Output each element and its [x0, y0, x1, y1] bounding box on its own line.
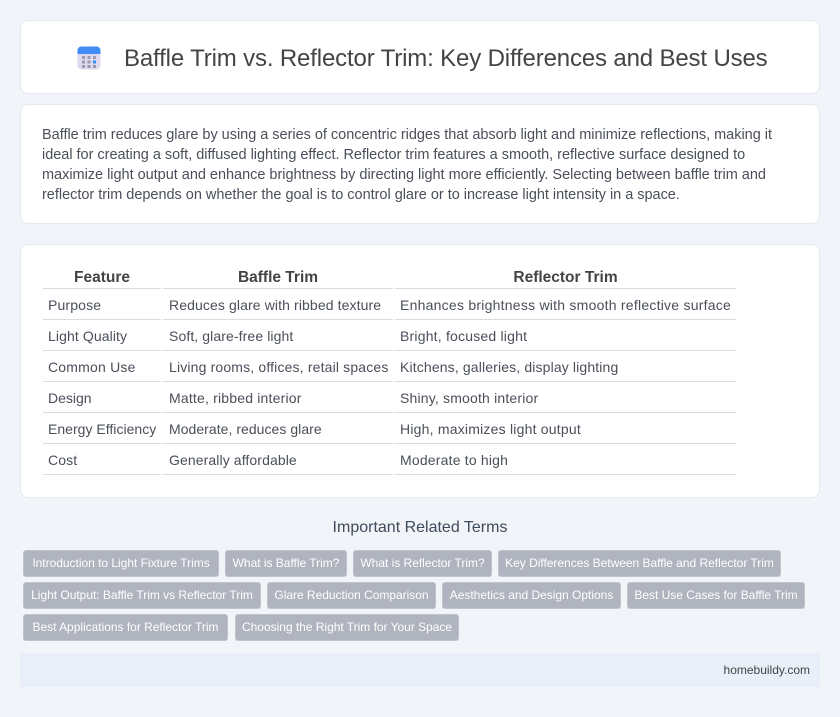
intro text [42, 127, 772, 203]
tag: Aesthetics and Design Options [450, 588, 613, 602]
footer text: homebuildy.com: homebuildy.com [724, 663, 810, 677]
row: cost: Moderate to high [400, 452, 508, 468]
tag: Light Output: Baffle Trim vs Reflector Trim [31, 588, 253, 602]
tag: Best Use Cases for Baffle Trim [634, 588, 798, 602]
comparison table panel [20, 244, 820, 498]
intro text: reflector trim depends on whether the goal is to control glare or to increase light intensity in a space. [42, 187, 680, 203]
intro panel [20, 104, 820, 224]
header panel [20, 20, 820, 94]
table header: feature: Feature [74, 269, 130, 286]
row: design [48, 390, 538, 406]
row: energy efficiency: Energy Efficiency [48, 421, 156, 437]
row: cost [48, 452, 508, 468]
tag: Glare Reduction Comparison [274, 588, 429, 602]
tag [225, 550, 347, 577]
row: purpose [48, 297, 731, 313]
tag [267, 582, 436, 609]
tag: What is Baffle Trim? [233, 556, 339, 570]
related terms tags [23, 550, 805, 641]
table header: baffle trim: Baffle Trim [238, 269, 318, 286]
row: common use: Common Use [48, 359, 136, 375]
tag [442, 582, 621, 609]
row: energy efficiency [48, 421, 581, 437]
row: light quality: Soft, glare-free light [169, 328, 293, 344]
tag: Introduction to Light Fixture Trims [32, 556, 210, 570]
row: purpose: Purpose [48, 297, 101, 313]
tag [498, 550, 781, 577]
row: common use: Kitchens, galleries, display lighting [400, 359, 618, 375]
intro text: Baffle trim reduces glare by using a series of concentric ridges that absorb light and minimize reflections, making it [42, 127, 772, 143]
tag: What is Reflector Trim? [360, 556, 485, 570]
row: light quality [48, 328, 527, 344]
tag [23, 614, 228, 641]
title: Baffle Trim vs. Reflector Trim: Key Differences and Best Uses [124, 45, 768, 72]
row: purpose: Enhances brightness with smooth reflective surface [400, 297, 731, 313]
row: light quality: Bright, focused light [400, 328, 527, 344]
row: design: Shiny, smooth interior [400, 390, 538, 406]
tag: Choosing the Right Trim for Your Space [242, 620, 452, 634]
tag [235, 614, 459, 641]
tag: Best Applications for Reflector Trim [32, 620, 219, 634]
intro text: maximize light output and enhance brightness by directing light more efficiently. Selecting between baffle trim and [42, 167, 766, 183]
row: design: Matte, ribbed interior [169, 390, 302, 406]
row: common use [48, 359, 618, 375]
row: common use: Living rooms, offices, retail spaces [169, 359, 388, 375]
table header: reflector trim: Reflector Trim [513, 269, 618, 286]
tag: Key Differences Between Baffle and Reflector Trim [505, 556, 774, 570]
row: cost: Generally affordable [169, 452, 297, 468]
row: cost: Cost [48, 452, 77, 468]
footer bar [20, 653, 820, 687]
intro text: ideal for creating a soft, diffused lighting effect. Reflector trim features a smooth, reflective surface designed to [42, 147, 745, 163]
related terms heading: Important Related Terms [333, 519, 507, 536]
row: energy efficiency: Moderate, reduces glare [169, 421, 322, 437]
tag [23, 550, 219, 577]
tag [23, 582, 261, 609]
row: purpose: Reduces glare with ribbed texture [169, 297, 381, 313]
icon: calendar [78, 46, 100, 70]
row: energy efficiency: High, maximizes light output [400, 421, 581, 437]
row: design: Design [48, 390, 92, 406]
tag [353, 550, 492, 577]
row: light quality: Light Quality [48, 328, 127, 344]
tag [627, 582, 805, 609]
